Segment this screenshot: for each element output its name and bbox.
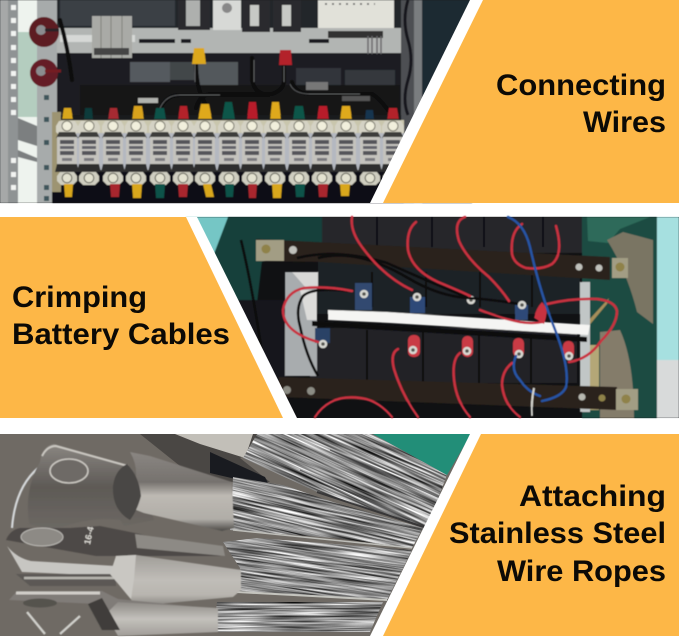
icon: red round terminals	[29, 17, 61, 87]
photo: dark gap behind ropes	[140, 434, 280, 482]
photo: background wire arc	[12, 468, 38, 528]
photo: middle crimped lug: 16-4	[82, 526, 96, 545]
heading: crimping battery cables: Battery Cables	[12, 318, 230, 351]
photo: black wires	[60, 20, 388, 110]
photo: steel wire rope strands	[216, 434, 447, 632]
panel: connecting wires photo	[0, 0, 679, 203]
photo: row of fuses	[55, 121, 405, 185]
heading: connecting wires: Connecting	[496, 69, 666, 102]
photo: teal tarp	[373, 434, 471, 475]
photo: black cables	[241, 240, 518, 376]
photo: upper crimped lug	[28, 444, 234, 531]
photo: fuse bus strip	[52, 112, 404, 203]
photo: white insulating strip	[312, 310, 590, 342]
photo: enclosure surroundings	[186, 217, 679, 418]
photo: red cables	[283, 217, 617, 417]
photo: coloured crimp sleeves	[62, 48, 399, 198]
photo: terminal bars	[256, 239, 638, 410]
photo: blue cables	[508, 217, 567, 401]
heading: attaching stainless steel wire ropes: Attaching	[519, 480, 666, 513]
heading: attaching stainless steel wire ropes: Wire Ropes	[497, 555, 666, 588]
photo: lower crimped lug	[9, 591, 218, 636]
heading: crimping battery cables: Crimping	[12, 281, 147, 314]
panel: crimping battery cables photo	[186, 217, 679, 418]
photo: upper cabinet and din rail	[57, 0, 472, 203]
panel: connecting wires label	[370, 0, 679, 203]
photo: middle crimped lug	[6, 526, 241, 605]
photo: left rack rails	[0, 0, 57, 203]
panel: crimping battery cables label	[0, 217, 297, 418]
photo: batteries	[285, 217, 590, 412]
heading: crimping battery cables	[12, 281, 230, 351]
heading: attaching stainless steel wire ropes	[449, 480, 666, 588]
photo: terminal labels	[319, 290, 574, 360]
heading: attaching stainless steel wire ropes: Stainless Steel	[449, 517, 666, 550]
heading: connecting wires: Wires	[583, 106, 666, 139]
panel: stainless steel wire ropes label	[370, 434, 679, 636]
heading: connecting wires	[496, 69, 666, 139]
panel: stainless steel wire ropes photo	[0, 434, 470, 637]
